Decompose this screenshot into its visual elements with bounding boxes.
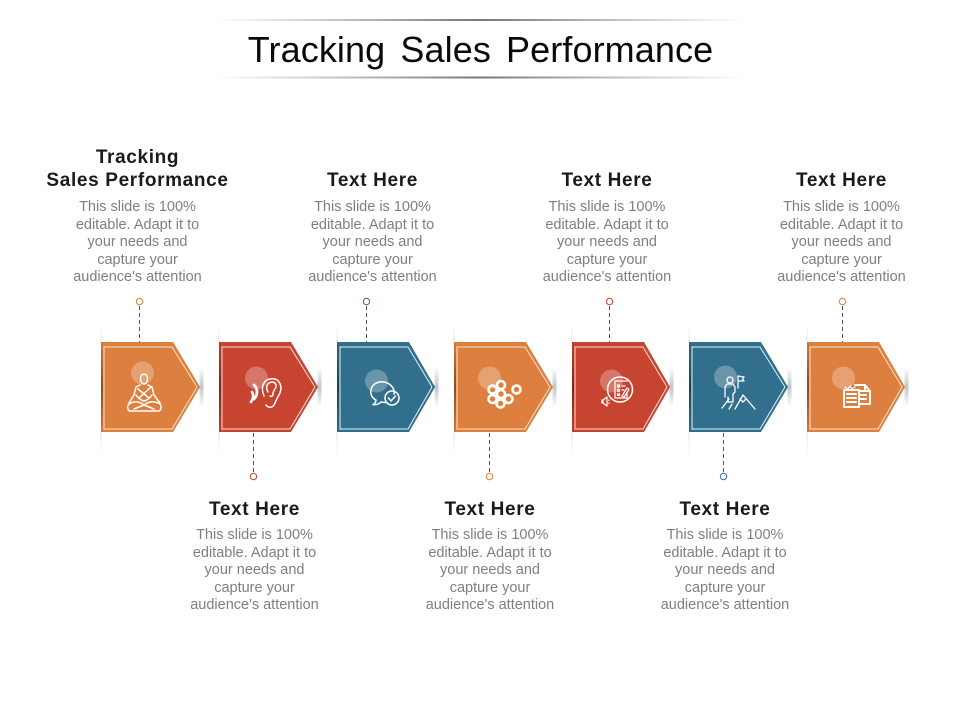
arrow 6: blue, climber: [688, 322, 792, 456]
arrow 1: orange, meditation: [100, 322, 204, 456]
text block: top 2: editable. Adapt it to: [311, 217, 434, 233]
text block: Tracking Sales Performance: [46, 147, 229, 285]
icon: checklist with megaphone: [602, 377, 632, 406]
text block: Tracking Sales Performance: audience's attention: [73, 269, 202, 285]
text block: top 2: This slide is 100%: [314, 199, 431, 215]
text block: bottom 1: capture your: [214, 580, 295, 596]
text block: Tracking Sales Performance: editable. Adapt it to: [76, 217, 199, 233]
text block: top 3: Text Here: [561, 170, 653, 191]
text block: top 2: [308, 170, 437, 285]
connector: top 2: [363, 298, 370, 342]
text block: top 4: Text Here: [796, 170, 887, 191]
arrow 4: orange, circles: [454, 322, 556, 456]
icon: speech bubble with check: [371, 382, 399, 405]
text block: top 3: audience's attention: [543, 269, 671, 285]
text block: bottom 2: Text Here: [444, 499, 536, 520]
text block: bottom 2: your needs and: [440, 562, 540, 578]
icon: ear with sound waves: [251, 379, 281, 407]
text block: bottom 2: editable. Adapt it to: [428, 545, 552, 561]
text block: bottom 3: your needs and: [675, 562, 775, 578]
text block: bottom 1: [190, 499, 319, 613]
text block: bottom 2: This slide is 100%: [432, 527, 549, 543]
connector: bottom 1: [250, 433, 257, 480]
text block: top 2: capture your: [332, 252, 413, 268]
text block: bottom 1: Text Here: [209, 499, 300, 520]
text block: bottom 1: your needs and: [205, 562, 304, 578]
text block: Tracking Sales Performance: your needs and: [88, 234, 187, 250]
text block: bottom 2: capture your: [450, 580, 530, 596]
arrow 5: red, checklist: [572, 322, 674, 456]
text block: bottom 3: editable. Adapt it to: [663, 545, 787, 561]
connector: top 1: [136, 298, 143, 342]
text block: bottom 3: Text Here: [679, 499, 771, 520]
text block: bottom 2: audience's attention: [426, 597, 554, 613]
text block: bottom 1: audience's attention: [190, 597, 319, 613]
text block: top 4: capture your: [801, 252, 882, 268]
connector: bottom 3: [720, 433, 727, 480]
text block: top 3: editable. Adapt it to: [545, 217, 669, 233]
text block: bottom 1: This slide is 100%: [196, 527, 313, 543]
text block: top 3: capture your: [567, 252, 647, 268]
text block: top 2: your needs and: [323, 234, 422, 250]
connector: top 4: [839, 298, 846, 342]
arrow 3: blue, chat: [336, 322, 438, 456]
text block: top 3: This slide is 100%: [549, 199, 666, 215]
arrow 2: red, ear: [218, 322, 322, 456]
connector: bottom 2: [486, 433, 493, 480]
text block: top 4: This slide is 100%: [783, 199, 900, 215]
text block: bottom 3: [661, 499, 789, 613]
text block: top 2: Text Here: [327, 170, 418, 191]
icon: cluster of rings: [488, 381, 520, 408]
text block: Tracking Sales Performance: Tracking: [96, 147, 179, 168]
text block: bottom 3: audience's attention: [661, 597, 789, 613]
text block: Tracking Sales Performance: capture your: [97, 252, 178, 268]
connector: top 3: [606, 298, 613, 342]
icon: stacked documents: [844, 385, 870, 407]
text block: top 2: audience's attention: [308, 269, 437, 285]
text block: bottom 3: This slide is 100%: [667, 527, 784, 543]
text block: top 4: your needs and: [792, 234, 891, 250]
text block: bottom 3: capture your: [685, 580, 765, 596]
icon: meditating figure: [128, 374, 161, 411]
text block: top 4: editable. Adapt it to: [780, 217, 903, 233]
arrow 7: orange, documents: [806, 322, 908, 456]
text block: top 3: your needs and: [557, 234, 657, 250]
text block: bottom 1: editable. Adapt it to: [193, 545, 316, 561]
text block: Tracking Sales Performance: Sales Performance: [46, 170, 229, 191]
text block: Tracking Sales Performance: This slide is 100%: [79, 199, 196, 215]
text block: bottom 2: [426, 499, 554, 613]
title: Tracking Sales Performance: [248, 29, 713, 70]
text block: top 4: [777, 170, 906, 285]
text block: top 3: [543, 170, 671, 285]
icon: person on mountain with flag: [722, 376, 755, 409]
text block: top 4: audience's attention: [777, 269, 906, 285]
